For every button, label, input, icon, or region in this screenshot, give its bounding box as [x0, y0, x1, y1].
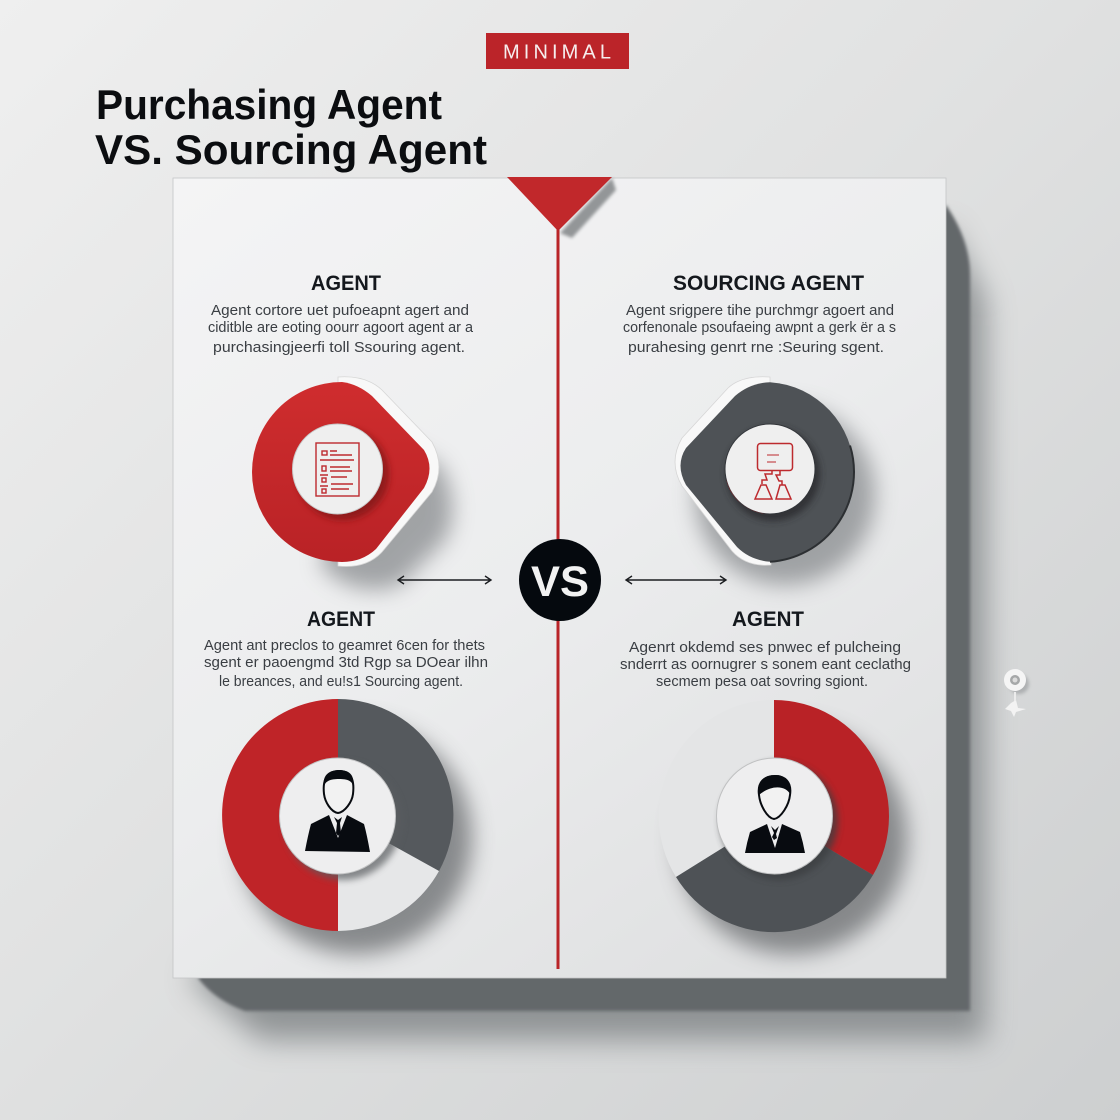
title: VS. Sourcing Agent	[95, 126, 487, 173]
segment: dark grey	[338, 699, 453, 871]
segment: red	[222, 699, 338, 931]
small ring-and-pin ornament	[1004, 669, 1029, 717]
text block: lower right: Agenrt okdemd ses pnwec ef pulcheing	[629, 640, 901, 656]
heading: sourcing agent: SOURCING AGENT	[673, 272, 864, 295]
VS badge: VS	[531, 558, 589, 606]
icon: org network	[755, 444, 792, 499]
segment: dark grey	[676, 816, 873, 932]
inner disc shadow	[726, 427, 820, 521]
text block: top right: corfenonale psoufaeing awpnt a gerk ër a s	[623, 320, 896, 336]
donut shadow	[677, 724, 907, 954]
dark dial body	[680, 382, 854, 562]
heading: agent lower left: AGENT	[307, 608, 375, 631]
inner disc	[725, 424, 815, 514]
inner disc shadow	[720, 762, 838, 880]
text block: lower left: le breances, and eu!s1 Sourcing agent.	[219, 674, 463, 690]
icon: businessman	[745, 775, 805, 853]
arrow: right double-headed	[626, 576, 726, 584]
text block: lower right: snderrt as oornugrer s sonem eant ceclathg	[620, 657, 911, 673]
heading: agent lower right: AGENT	[732, 608, 804, 631]
heading: agent top left: AGENT	[311, 272, 381, 295]
chart: dark rounded dial	[675, 377, 875, 585]
text block: top right: Agent srigpere tihe purchmgr agoert and	[626, 303, 894, 319]
text block: top left	[208, 303, 474, 356]
text block: top left: ciditble are eoting oourr agoort agent ar a	[208, 320, 474, 336]
text block: lower right: secmem pesa oat sovring sgiont.	[656, 674, 868, 690]
arrow: left double-headed	[398, 576, 491, 584]
donut shadow	[240, 722, 472, 954]
segment: light grey	[338, 815, 439, 931]
text block: lower left	[204, 638, 488, 690]
text block: lower left: Agent ant preclos to geamret 6cen for thets	[204, 638, 485, 654]
inner disc	[292, 424, 382, 514]
donut chart: left	[222, 699, 472, 954]
inner disc shadow	[297, 428, 389, 520]
icon: businessman	[305, 770, 370, 852]
red pointer triangle	[507, 177, 616, 238]
chart: red rounded dial	[252, 377, 452, 590]
text block: top left: Agent cortore uet pufoeapnt agert and	[211, 303, 469, 319]
dial shadow	[695, 405, 875, 585]
inner disc	[716, 758, 832, 874]
title	[95, 81, 487, 173]
red dial body	[252, 382, 430, 562]
text block: lower left: sgent er paoengmd 3td Rgp sa DOear ilhn	[204, 655, 488, 671]
dial shadow	[320, 425, 452, 590]
text block: lower right	[620, 640, 911, 690]
centre divider line	[556, 228, 560, 969]
panel shadow	[190, 205, 985, 1040]
text block: top right: purahesing genrt rne :Seuring sgent.	[628, 340, 884, 356]
segment: red	[774, 700, 889, 875]
text block: top left: purchasingjeerfi toll Ssouring agent.	[213, 340, 465, 356]
inner disc shadow	[284, 762, 402, 880]
VS badge	[519, 539, 601, 621]
icon: checklist document	[316, 443, 359, 496]
segment: light grey	[659, 700, 774, 877]
main comparison panel	[173, 177, 946, 978]
white dial rim	[675, 377, 771, 565]
white dial rim	[338, 377, 439, 566]
MINIMAL badge: MINIMAL	[503, 42, 611, 64]
inner disc	[280, 758, 396, 874]
title: Purchasing Agent	[96, 81, 442, 128]
donut chart: right	[659, 700, 907, 954]
text block: top right	[623, 303, 896, 356]
MINIMAL badge	[486, 33, 629, 69]
